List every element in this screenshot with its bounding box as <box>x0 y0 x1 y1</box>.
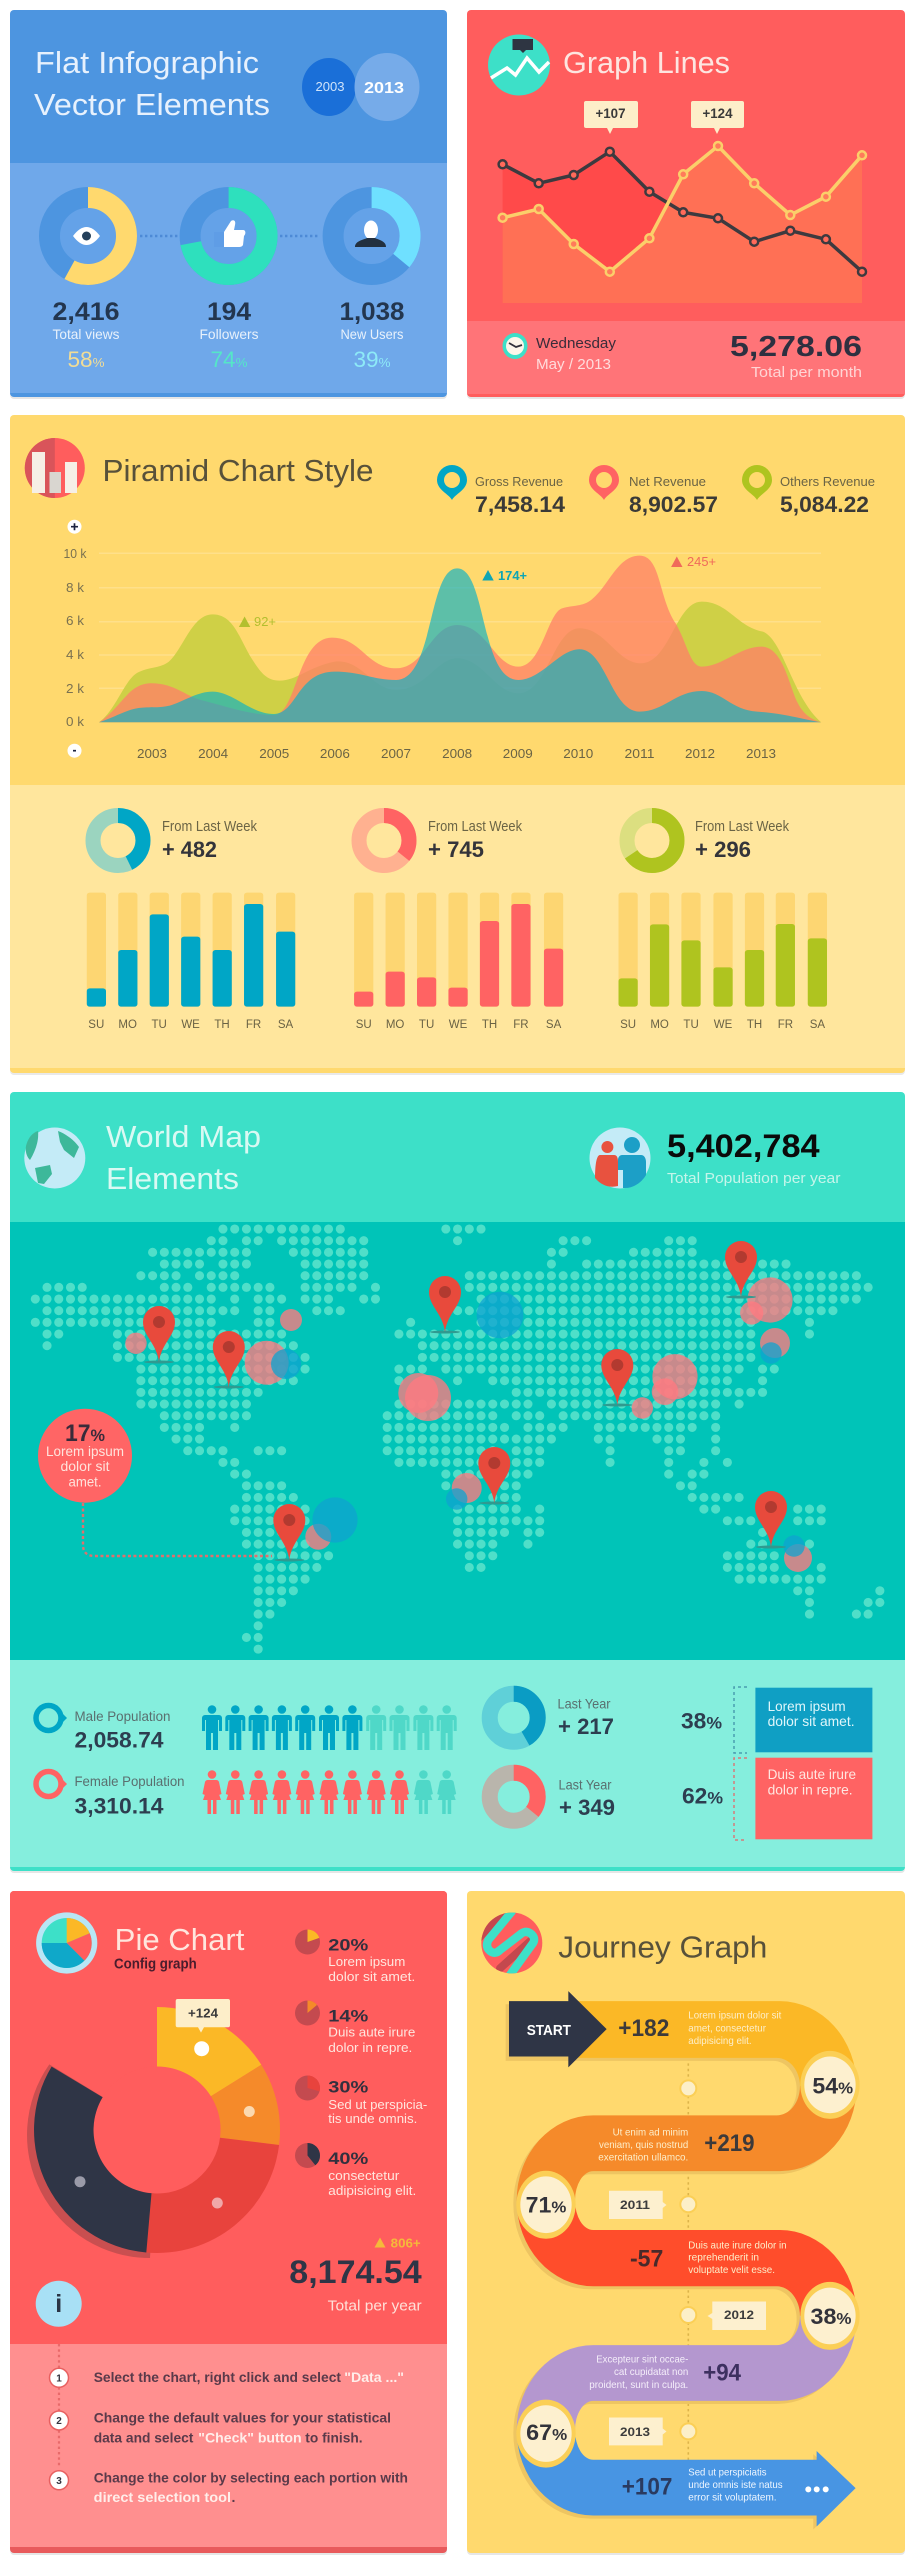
date: May / 2013 <box>536 356 611 373</box>
stat: female population: 3,310.14 <box>74 1794 164 1818</box>
callout: 17% <box>38 1409 132 1503</box>
stat: total views: 58% <box>68 347 105 372</box>
step: -57: reprehenderit in <box>688 2252 759 2264</box>
stat: male population: 2,058.74 <box>74 1728 164 1752</box>
badge: 67%: 67% <box>526 2420 567 2445</box>
year tag: 2011 <box>609 2191 666 2219</box>
step 2 <box>50 2410 391 2445</box>
step: +94: proident, sunt in culpa. <box>589 2379 688 2391</box>
x axis years: 2007 <box>381 746 411 761</box>
stat: new users: 39% <box>354 347 391 372</box>
total per year: 806+ <box>391 2236 421 2250</box>
bar chart: green week: TU <box>683 1019 699 1031</box>
donut: total views <box>50 198 126 274</box>
heading: pie chart <box>114 1922 245 1972</box>
x axis years: 2005 <box>259 746 289 761</box>
step: +219: exercitation ullamco. <box>598 2151 688 2163</box>
bar chart: red week: WE <box>449 1019 468 1031</box>
legend: 14%: dolor in repre. <box>328 2041 412 2055</box>
dotted world map <box>35 1229 881 1649</box>
bar chart: red week: SU <box>356 1019 372 1031</box>
step: +182 <box>618 2010 781 2047</box>
map bubbles: blue <box>271 1292 805 1557</box>
legend: 14%: 14% <box>328 2007 368 2026</box>
step 1: "Data ..." <box>344 2369 404 2385</box>
total per year: 8,174.54 <box>289 2254 422 2290</box>
year tag: 2012 <box>708 2302 766 2330</box>
legend: 14% <box>295 2000 415 2055</box>
panel: piramid chart style <box>10 415 905 1075</box>
donut: last year female <box>490 1773 615 1821</box>
icon: thumb up <box>214 220 245 247</box>
pictogram: male row <box>202 1705 457 1750</box>
bar chart: red week: SA <box>546 1019 562 1031</box>
panel: journey graph <box>467 1891 905 2555</box>
stat: followers: 194 <box>207 298 251 326</box>
step 3: Change the color by selecting each portion with <box>94 2469 408 2485</box>
year tag: 2013: 2013 <box>620 2425 650 2439</box>
donut: new users <box>333 198 410 274</box>
weekly stat: +745 <box>359 816 522 866</box>
step: -57: voluptate velit esse. <box>688 2264 775 2276</box>
weekly stat: +745: From Last Week <box>428 818 522 835</box>
stat: new users: New Users <box>340 326 404 342</box>
legend: gross revenue: Gross Revenue <box>475 474 563 489</box>
callout: 17%: amet. <box>68 1474 102 1490</box>
year badges: 2003 <box>316 79 344 94</box>
weekly stat: +745: + 745 <box>428 837 484 862</box>
heading: pie chart: Config graph <box>114 1956 197 1972</box>
icon: journey <box>478 1912 542 1975</box>
year tag: 2013 <box>609 2418 666 2445</box>
year tag: 2011: 2011 <box>620 2198 650 2212</box>
heading: flat infographic: Flat Infographic <box>35 45 259 80</box>
share: 38%: Lorem ipsum <box>768 1698 846 1714</box>
donut: last year male: Last Year <box>558 1696 611 1712</box>
ribbon segment: orange <box>517 2086 857 2200</box>
stat: male population: Male Population <box>74 1708 170 1724</box>
legend: 30%: tis unde omnis. <box>328 2112 417 2126</box>
weekly stat: +296: From Last Week <box>695 818 789 835</box>
bar chart: blue week: MO <box>118 1019 137 1031</box>
year badges: 2013 <box>364 80 404 97</box>
bar chart: red week: MO <box>386 1019 404 1031</box>
zoom control: minus <box>68 744 82 758</box>
step: +219: veniam, quis nostrud <box>599 2139 688 2151</box>
legend: 40%: adipisicing elit. <box>328 2184 416 2198</box>
legend: 20% <box>295 1930 415 1984</box>
donut: last year male: + 217 <box>558 1714 614 1739</box>
step: -57: Duis aute irure dolor in <box>688 2239 787 2251</box>
x axis years <box>137 746 776 761</box>
total population: Total Population per year <box>667 1170 841 1187</box>
callout: 17%: dolor sit <box>60 1458 110 1474</box>
icon: people <box>590 1128 650 1188</box>
stat: total views <box>52 298 120 372</box>
step: +94 <box>589 2354 742 2391</box>
badge: 54%: 54% <box>812 2074 853 2099</box>
annotation: 92+: 92+ <box>254 614 276 629</box>
bar chart: blue week: SA <box>278 1019 293 1031</box>
legend: 14%: Duis aute irure <box>328 2026 415 2040</box>
step 1 <box>50 2368 404 2387</box>
ribbon segment: red <box>517 2200 857 2316</box>
step 3 <box>50 2469 408 2505</box>
y axis labels: 6 k <box>66 613 85 628</box>
legend: gross revenue <box>437 465 566 517</box>
x axis years: 2013 <box>746 746 776 761</box>
panel: flat infographic overview <box>10 10 447 399</box>
bar chart: red week <box>354 893 563 1031</box>
callout: +124 <box>176 1999 230 2033</box>
step 2: Change the default values for your statistical <box>94 2410 391 2426</box>
share: 38%: dolor sit amet. <box>768 1713 855 1729</box>
step: +219 <box>598 2126 755 2163</box>
heading: world map elements <box>106 1119 261 1196</box>
heading: pie chart: Pie Chart <box>115 1922 245 1957</box>
legend: others revenue: Others Revenue <box>780 474 875 489</box>
share: 62%: Duis aute irure <box>768 1766 856 1782</box>
share: 38%: 38% <box>681 1708 722 1734</box>
step 2: 2 <box>56 2416 62 2427</box>
total per year <box>289 2236 422 2314</box>
stat: female population <box>36 1772 184 1818</box>
date <box>536 335 616 373</box>
icon: graph <box>488 34 550 96</box>
step 1: 1 <box>56 2374 62 2384</box>
panel: graph lines <box>467 10 905 399</box>
bar chart: red week: FR <box>513 1019 529 1031</box>
icon: clock <box>502 333 528 359</box>
year badges <box>302 53 420 121</box>
bar chart: blue week: TU <box>152 1019 167 1031</box>
legend: 30%: 30% <box>328 2078 368 2097</box>
bar chart: red week: TU <box>419 1019 434 1031</box>
bar chart: green week: MO <box>650 1019 669 1031</box>
x axis years: 2003 <box>137 746 167 761</box>
callout: +124 <box>691 101 744 134</box>
total population: 5,402,784 <box>667 1128 820 1164</box>
donut: last year female: Last Year <box>558 1776 612 1792</box>
y axis labels: 8 k <box>66 580 85 595</box>
x axis years: 2011 <box>624 746 654 761</box>
bar chart: red week: TH <box>482 1019 497 1031</box>
icon: info: i <box>55 2290 62 2318</box>
journey ribbon <box>506 1991 860 2529</box>
share: 62%: 62% <box>682 1784 723 1808</box>
step: +182: amet, consectetur <box>688 2022 766 2034</box>
icon: bars <box>25 438 85 498</box>
donut: last year female: + 349 <box>559 1795 615 1820</box>
total per month: 5,278.06 <box>730 331 862 363</box>
area chart <box>99 556 821 722</box>
total per month <box>730 331 862 381</box>
date: Wednesday <box>536 335 616 352</box>
x axis years: 2009 <box>503 746 533 761</box>
bar chart: blue week <box>87 893 295 1031</box>
legend: 40% <box>295 2143 416 2198</box>
total per year: Total per year <box>328 2297 422 2314</box>
bar chart: green week: SA <box>810 1019 825 1031</box>
annotation: 174+: 174+ <box>498 568 527 583</box>
bar chart: green week <box>619 893 827 1031</box>
donut: last year male <box>490 1694 614 1742</box>
timeline nodes <box>680 2080 696 2439</box>
stat: new users: 1,038 <box>340 298 405 326</box>
legend: 20%: Lorem ipsum <box>328 1955 405 1969</box>
ribbon segment: purple <box>517 2316 857 2430</box>
step: +107: unde omnis iste natus <box>688 2479 783 2491</box>
share: 62% <box>682 1758 872 1840</box>
callout: +107: +107 <box>596 105 626 121</box>
annotation: 245+: 245+ <box>687 554 716 569</box>
share: 62%: dolor in repre. <box>768 1781 853 1797</box>
icon: globe <box>24 1128 85 1188</box>
bar chart: blue week: SU <box>88 1019 104 1031</box>
weekly stat: +296: + 296 <box>695 837 751 862</box>
bar chart: blue week: FR <box>246 1019 261 1031</box>
ribbon segment: yellow <box>570 2001 857 2086</box>
map bubbles: pink <box>125 1277 812 1572</box>
step: +182: adipisicing elit. <box>688 2035 752 2047</box>
heading: flat infographic <box>34 45 270 122</box>
weekly stat: +482: From Last Week <box>162 818 257 835</box>
callout connector <box>83 1503 272 1556</box>
ribbon segment: blue arrow <box>517 2430 856 2526</box>
heading: journey graph: Journey Graph <box>558 1930 767 1965</box>
step: +94: +94 <box>703 2359 742 2386</box>
stat: total views: Total views <box>52 326 120 342</box>
step: +107 <box>622 2466 829 2504</box>
step: -57 <box>630 2239 787 2276</box>
step: +182: +182 <box>618 2015 669 2042</box>
weekly stat: +296 <box>627 816 789 866</box>
line chart <box>499 142 866 303</box>
y axis labels: 10 k <box>64 546 87 561</box>
y axis labels: 4 k <box>66 647 85 662</box>
zoom control: plus <box>68 520 82 534</box>
weekly stat: +482 <box>93 816 257 866</box>
map pins <box>143 1241 787 1562</box>
x axis years: 2012 <box>685 746 715 761</box>
step: +94: cat cupidatat non <box>614 2366 688 2378</box>
weekly stat: +482: + 482 <box>162 837 217 862</box>
legend: gross revenue: 7,458.14 <box>475 492 566 517</box>
legend: 40%: 40% <box>328 2149 368 2168</box>
step 3: 3 <box>56 2476 62 2487</box>
step 3: . <box>232 2489 235 2505</box>
step 1: Select the chart, right click and select <box>94 2369 341 2385</box>
start arrow <box>509 1991 607 2067</box>
stat: male population <box>36 1706 170 1752</box>
donut chart <box>27 2007 280 2258</box>
step: +94: Excepteur sint occae- <box>596 2354 689 2366</box>
legend: others revenue: 5,084.22 <box>780 492 869 517</box>
stat: new users <box>340 298 405 372</box>
timeline spine <box>687 2058 689 2460</box>
y axis labels: 0 k <box>66 714 85 729</box>
badge: 71%: 71% <box>526 2193 566 2218</box>
step: -57: -57 <box>630 2246 663 2273</box>
icon: eye <box>73 227 100 245</box>
x axis years: 2010 <box>563 746 593 761</box>
callout: +124: +124 <box>702 105 733 121</box>
panel: world map elements <box>10 1092 905 1873</box>
step 2: to finish. <box>305 2429 363 2445</box>
icon: pie <box>36 1912 97 1974</box>
step: +107: +107 <box>622 2474 672 2501</box>
bar chart: green week: WE <box>714 1019 733 1031</box>
step: +107: error sit voluptatem. <box>688 2492 777 2504</box>
heading: flat infographic: Vector Elements <box>34 87 270 122</box>
bar chart: green week: FR <box>778 1019 793 1031</box>
bar chart: green week: SU <box>620 1019 636 1031</box>
step 2: data and select <box>94 2429 194 2445</box>
annotation: 92+ <box>239 614 276 629</box>
step 2: "Check" button <box>198 2429 302 2445</box>
year tag: 2012: 2012 <box>724 2308 754 2322</box>
x axis years: 2008 <box>442 746 472 761</box>
heading: world map elements: Elements <box>106 1161 239 1196</box>
step: +219: +219 <box>704 2130 755 2157</box>
callout: +107 <box>584 101 638 134</box>
share: 38% <box>681 1687 872 1753</box>
pictogram: female row <box>202 1770 456 1814</box>
step: +182: Lorem ipsum dolor sit <box>688 2010 781 2022</box>
start label: START <box>527 2022 571 2039</box>
percent badge discs <box>516 2051 860 2468</box>
step: +219: Ut enim ad minim <box>613 2126 689 2138</box>
icon: user <box>355 220 386 247</box>
stat: total views: 2,416 <box>52 298 120 326</box>
legend: 30%: Sed ut perspicia- <box>328 2098 427 2112</box>
annotation: 245+ <box>671 554 716 569</box>
callout: 17%: 17% <box>65 1420 105 1447</box>
heading: graph lines: Graph Lines <box>563 45 730 80</box>
heading: world map elements: World Map <box>106 1119 261 1154</box>
y axis labels: 2 k <box>66 681 85 696</box>
bar chart: green week: TH <box>747 1019 762 1031</box>
callout: 17%: Lorem ipsum <box>46 1443 124 1459</box>
legend: others revenue <box>742 465 875 517</box>
step 3: direct selection tool <box>94 2489 231 2505</box>
stat: female population: Female Population <box>74 1773 184 1789</box>
legend: 20%: dolor sit amet. <box>328 1970 415 1984</box>
stat: followers: 74% <box>210 347 248 372</box>
stat: followers <box>200 298 258 372</box>
donut: followers <box>190 198 267 274</box>
total per month: Total per month <box>751 364 862 381</box>
legend: net revenue <box>589 465 718 517</box>
stat: followers: Followers <box>200 326 258 342</box>
bar chart: blue week: TH <box>214 1019 230 1031</box>
x axis years: 2004 <box>198 746 228 761</box>
bar chart: blue week: WE <box>181 1019 200 1031</box>
panel: pie chart <box>10 1891 447 2555</box>
badge: 38%: 38% <box>810 2304 852 2329</box>
y axis labels <box>64 546 87 729</box>
legend: 40%: consectetur <box>328 2169 399 2183</box>
legend: 30% <box>295 2076 427 2126</box>
x axis years: 2006 <box>320 746 350 761</box>
annotation: 174+ <box>482 568 527 583</box>
connector dots <box>140 235 319 237</box>
legend: 20%: 20% <box>328 1936 368 1955</box>
icon: info <box>36 2281 82 2327</box>
callout: +124: +124 <box>188 2006 219 2020</box>
legend: net revenue: Net Revenue <box>629 474 706 489</box>
heading: piramid chart style: Piramid Chart Style <box>102 453 374 488</box>
step: +107: Sed ut perspiciatis <box>688 2466 767 2478</box>
total population <box>667 1128 841 1187</box>
legend: net revenue: 8,902.57 <box>629 492 718 517</box>
